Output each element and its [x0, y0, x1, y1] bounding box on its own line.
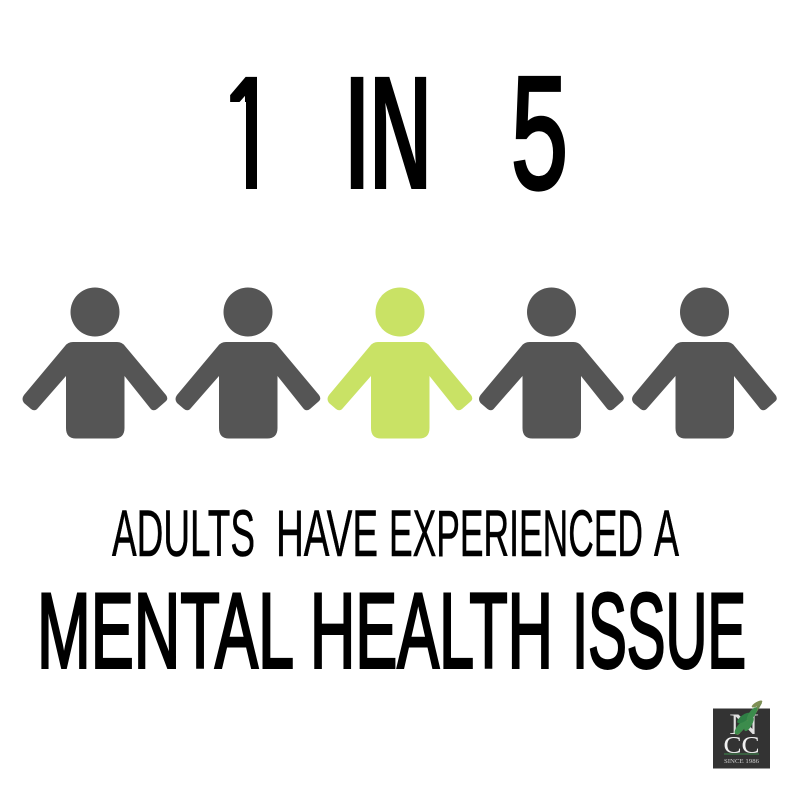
row of five people icons: [22, 288, 777, 438]
icon: person 5 grey: [632, 288, 777, 438]
title: 1 in 5: IN: [345, 41, 432, 224]
logo: NCC since 1986: [713, 699, 770, 768]
title: 1 in 5: [230, 76, 565, 192]
icon: person 3 highlighted green: [328, 288, 472, 438]
subtitle: adults have experienced a: [112, 497, 679, 570]
logo green rule: [724, 754, 759, 755]
subtitle: adults have experienced a: A: [654, 497, 679, 570]
icon: person 4 grey: [479, 288, 624, 438]
logo background: [713, 708, 770, 768]
icon: person 1 grey: [22, 288, 167, 438]
heading: mental health issue: MENTAL: [37, 570, 294, 690]
subtitle: adults have experienced a: HAVE: [276, 497, 378, 570]
heading: mental health issue: HEALTH: [310, 570, 553, 690]
icon: person 2 grey: [176, 288, 320, 438]
logo since 1986: SINCE 1986: [724, 758, 760, 765]
logo leaf branch: [733, 699, 763, 736]
heading: mental health issue: [37, 570, 746, 690]
logo letters CC: CC: [724, 733, 760, 759]
logo letter N: N: [729, 708, 759, 741]
title: 1 in 5: 1: [224, 41, 274, 224]
subtitle: adults have experienced a: ADULTS: [112, 497, 255, 570]
title: 1 in 5: 5: [511, 43, 568, 222]
